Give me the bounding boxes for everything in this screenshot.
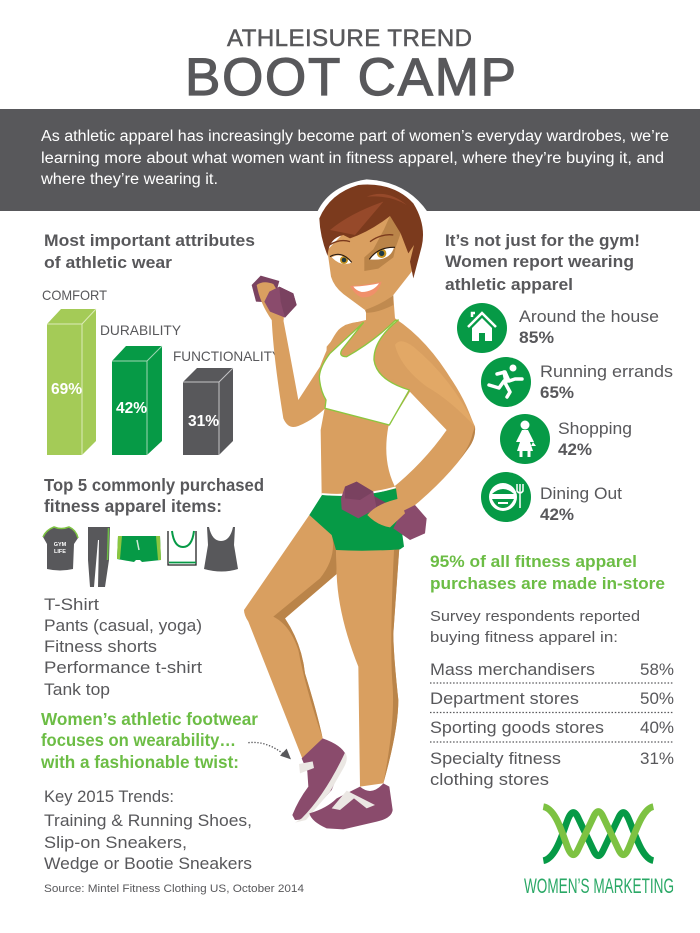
list: apparel items: T-Shirt xyxy=(44,596,99,614)
row: mass merchandisers: 58% xyxy=(640,661,674,679)
logo: Women's Marketing xyxy=(524,807,674,898)
illustration: shorts xyxy=(309,487,404,551)
text: key trends: Wedge or Bootie Sneakers xyxy=(44,855,252,873)
text: survey intro: Survey respondents reported xyxy=(430,608,640,625)
illustration: back arm xyxy=(272,318,365,427)
item: dining out xyxy=(481,472,622,524)
text: key trends: Training & Running Shoes, xyxy=(44,812,252,830)
hair xyxy=(319,185,423,278)
icon: t-shirt xyxy=(43,527,78,570)
item: shopping: 42% xyxy=(558,441,592,459)
heading: not just for the gym: Women report wearing xyxy=(445,252,634,271)
illustration: legs and shoes xyxy=(244,515,399,829)
illustration: upper dumbbell and hand xyxy=(252,276,297,323)
heading: not just for the gym xyxy=(445,231,640,294)
item: shopping xyxy=(500,414,632,464)
bar: durability 42% xyxy=(100,322,182,455)
row: sporting goods stores: 40% xyxy=(640,719,674,737)
illustration: lower dumbbell and hand xyxy=(341,482,427,540)
heading: attributes xyxy=(44,231,255,272)
source: Source: Mintel Fitness Clothing US, October 2014 xyxy=(44,883,304,895)
item: running errands: Running errands xyxy=(540,363,673,381)
list: apparel items: Pants (casual, yoga) xyxy=(44,617,202,635)
panel: top 5 apparel items xyxy=(43,475,264,699)
text: survey intro xyxy=(430,608,640,646)
text: key trends xyxy=(44,788,252,873)
title: BOOT CAMP xyxy=(185,48,516,107)
face xyxy=(327,213,418,310)
icon: t-shirt: GYM xyxy=(54,542,67,548)
arrow: footwear callout xyxy=(248,742,291,759)
heading: footwear xyxy=(40,709,258,772)
heading: attributes: Most important attributes xyxy=(44,231,255,250)
row: sporting goods stores xyxy=(430,719,674,737)
heading: not just for the gym: It’s not just for the gym! xyxy=(445,231,640,250)
list: apparel items xyxy=(44,596,202,699)
heading: attributes: of athletic wear xyxy=(44,253,172,272)
heading: 95% in-store xyxy=(430,552,665,593)
row: department stores: Department stores xyxy=(430,690,579,708)
heading: footwear: focuses on wearability… xyxy=(41,730,236,750)
item: around the house: Around the house xyxy=(519,308,659,326)
bar: functionality 31% xyxy=(173,348,282,455)
panel: attributes bar chart xyxy=(42,231,282,455)
illustration: torso xyxy=(321,297,475,495)
row: specialty fitness clothing stores xyxy=(430,750,674,789)
table: store types xyxy=(430,661,674,789)
heading: 95% in-store: purchases are made in-store xyxy=(430,574,665,593)
text: key trends: Slip-on Sneakers, xyxy=(44,834,187,852)
mouth xyxy=(350,282,382,297)
item: shopping: Shopping xyxy=(558,420,632,438)
bent leg xyxy=(244,515,337,759)
bar: comfort 69% xyxy=(42,287,107,455)
item: around the house: 85% xyxy=(519,329,554,347)
bar: durability 42%: 42% xyxy=(116,400,147,417)
icon: performance t-shirt xyxy=(168,531,196,565)
heading: top 5: Top 5 commonly purchased xyxy=(44,475,264,495)
intro banner xyxy=(0,109,700,211)
item: around the house xyxy=(457,303,659,353)
eyes xyxy=(332,255,352,264)
row: specialty fitness clothing stores: clothing stores xyxy=(430,771,549,789)
heading: footwear: with a fashionable twist: xyxy=(40,752,239,772)
title: ATHLEISURE TREND xyxy=(227,25,472,52)
heading: not just for the gym: athletic apparel xyxy=(445,275,573,294)
heading: top 5 xyxy=(44,475,264,516)
raised shoe xyxy=(292,738,347,823)
item: running errands: 65% xyxy=(540,384,574,402)
item: running errands xyxy=(481,357,673,407)
panel: where women wear athletic apparel xyxy=(445,231,673,524)
row: specialty fitness clothing stores: Specialty fitness xyxy=(430,750,561,768)
panel: in-store purchases xyxy=(430,552,674,789)
list: apparel items: Performance t-shirt xyxy=(44,659,202,677)
icon: t-shirt: LIFE xyxy=(54,549,66,555)
standing leg xyxy=(336,548,399,787)
row: specialty fitness clothing stores: 31% xyxy=(640,750,674,768)
bar: comfort 69%: 69% xyxy=(51,381,82,398)
text: key trends: Key 2015 Trends: xyxy=(44,788,174,806)
row: mass merchandisers xyxy=(430,661,674,679)
bar: comfort 69%: COMFORT xyxy=(42,287,107,303)
intro banner: As athletic apparel has increasingly become part of women’s everyday wardrobes, we’re xyxy=(41,128,669,145)
bar: functionality 31%: 31% xyxy=(188,413,219,430)
bar: durability 42%: DURABILITY xyxy=(100,322,182,338)
row: sporting goods stores: Sporting goods stores xyxy=(430,719,604,737)
brows xyxy=(329,241,350,245)
heading: top 5: fitness apparel items: xyxy=(44,496,222,516)
heading: 95% in-store: 95% of all fitness apparel xyxy=(430,552,637,571)
hair halo xyxy=(317,179,427,223)
text: survey intro: buying fitness apparel in: xyxy=(430,629,618,646)
intro banner: learning more about what women want in fitness apparel, where they’re buying it, and xyxy=(41,150,664,167)
row: mass merchandisers: Mass merchandisers xyxy=(430,661,595,679)
list: apparel items: Tank top xyxy=(44,681,110,699)
row: department stores: 50% xyxy=(640,690,674,708)
icon: pants xyxy=(88,527,110,587)
illustration: right arm xyxy=(375,318,475,513)
bar: functionality 31%: FUNCTIONALITY xyxy=(173,348,282,364)
icon: tank top xyxy=(204,527,238,572)
icon: fitness shorts xyxy=(117,536,161,562)
list: apparel items: Fitness shorts xyxy=(44,638,157,656)
standing shoe xyxy=(309,783,393,829)
item: dining out: 42% xyxy=(540,506,574,524)
panel: footwear xyxy=(40,709,304,895)
intro banner: where they’re wearing it. xyxy=(40,171,218,188)
row: department stores xyxy=(430,690,674,708)
item: dining out: Dining Out xyxy=(540,485,622,503)
illustration: head and hair xyxy=(317,179,427,313)
illustration: sports bra xyxy=(319,320,409,425)
illustration: woman with dumbbells xyxy=(244,179,475,829)
heading: footwear: Women’s athletic footwear xyxy=(41,709,258,729)
